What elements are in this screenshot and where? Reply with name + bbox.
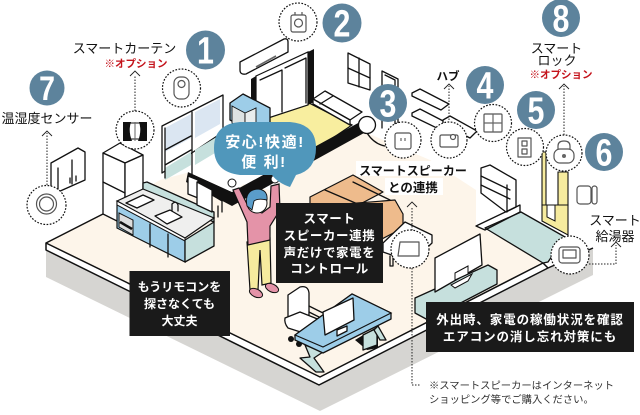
dotted leader lines and arrows xyxy=(42,71,621,385)
label: smart curtain: ※オプション xyxy=(104,58,168,70)
office chair xyxy=(285,287,325,347)
footnote: ショッピング等でご購入ください。 xyxy=(429,393,594,406)
callout: away from home xyxy=(426,302,634,352)
number badge 1: 1 xyxy=(197,30,214,72)
number badge 2: 2 xyxy=(334,3,350,45)
icon circle: curtain xyxy=(116,111,154,149)
number badge 3: 3 xyxy=(380,83,396,125)
callout: smart speaker link: スマート xyxy=(303,212,356,226)
window left xyxy=(162,95,223,180)
kitchen counter xyxy=(117,182,214,262)
icon circle: water heater panel xyxy=(551,236,589,274)
callout: smart speaker link: 声だけで家電を xyxy=(284,245,375,260)
fridge xyxy=(103,143,143,225)
speech bubble xyxy=(214,122,316,187)
number badge 7 xyxy=(30,70,64,108)
speaker link label: との連携 xyxy=(388,180,438,195)
floor lamp xyxy=(358,116,385,146)
tv and board xyxy=(415,234,497,320)
number badge 5 xyxy=(517,90,555,132)
speaker link label xyxy=(356,161,472,195)
number badge 4: 4 xyxy=(477,65,493,107)
label: smart curtain: スマートカーテン xyxy=(73,41,176,56)
label: smart water heater xyxy=(589,213,640,244)
speaker link text: スマートスピーカー xyxy=(359,164,467,178)
icon circle: window sensor xyxy=(474,104,512,142)
icon circle: humidity sensor xyxy=(27,186,66,224)
number badge 2 xyxy=(322,3,362,45)
number badge 7: 7 xyxy=(39,70,55,108)
sofa xyxy=(310,175,403,240)
door sensor xyxy=(577,186,597,204)
number badge 8 xyxy=(542,0,580,40)
callout: no remote needed: 大丈夫 xyxy=(161,313,198,328)
dining chairs xyxy=(188,176,222,217)
desk with monitor xyxy=(295,294,391,372)
wall shelves xyxy=(412,89,477,138)
label: smart curtain xyxy=(73,41,176,70)
bedroom with yellow floor xyxy=(186,102,364,206)
icon circle: smart plug xyxy=(385,122,421,158)
wall cupboard xyxy=(51,148,85,192)
label: hub: ハブ xyxy=(436,69,460,83)
footnote xyxy=(429,380,614,406)
icon circle: smart lock xyxy=(546,135,582,171)
number badge 5: 5 xyxy=(528,90,544,132)
number badge 4 xyxy=(466,65,504,107)
air conditioner xyxy=(240,39,288,74)
speech bubble: 便 利! xyxy=(241,154,287,171)
number badge 1 xyxy=(186,30,225,72)
icon circle: camera xyxy=(162,69,200,107)
icon circle: tablet xyxy=(391,230,429,268)
label: smart water heater: スマート xyxy=(589,213,640,228)
bubble text: 安心!快適! xyxy=(225,133,305,151)
label: smart lock: ※オプション xyxy=(530,69,592,81)
number badge 6: 6 xyxy=(596,132,612,174)
callout: no remote needed: もうリモコンを xyxy=(138,280,221,294)
label: humidity sensor: 温湿度センサー xyxy=(1,111,93,126)
callout: away from home: 外出時、家電の稼働状況を確認 xyxy=(436,312,624,327)
label: smart lock: ロック xyxy=(537,53,577,68)
label: smart lock xyxy=(530,41,592,81)
entrance and door xyxy=(476,152,568,263)
callout: no remote needed xyxy=(130,271,230,336)
callout: smart speaker link: コントロール xyxy=(290,262,369,276)
bench in bedroom xyxy=(313,91,362,125)
dresser xyxy=(481,165,516,212)
label: smart water heater: 給湯器 xyxy=(595,229,635,244)
number badge 6 xyxy=(585,132,623,174)
window right and door frame xyxy=(348,53,398,131)
house floor slab xyxy=(46,130,593,411)
icon circle: air conditioner adapter xyxy=(279,3,317,41)
table with tablet xyxy=(383,222,432,266)
number badge 3 xyxy=(369,83,407,125)
sliding door xyxy=(251,49,314,123)
callout: smart speaker link: スピーカー連携 xyxy=(284,228,375,243)
callout: no remote needed: 探さなくても xyxy=(144,297,215,311)
label: smart lock: スマート xyxy=(531,41,582,56)
person xyxy=(228,175,280,300)
callout: away from home: エアコンの消し忘れ対策にも xyxy=(443,329,617,344)
callout: smart speaker link xyxy=(276,203,383,283)
footnote: ※スマートスピーカーはインターネット xyxy=(429,380,614,392)
icon circle: hub xyxy=(431,122,467,158)
blue shelf xyxy=(230,94,270,133)
icon circle: wall switch xyxy=(506,128,544,166)
